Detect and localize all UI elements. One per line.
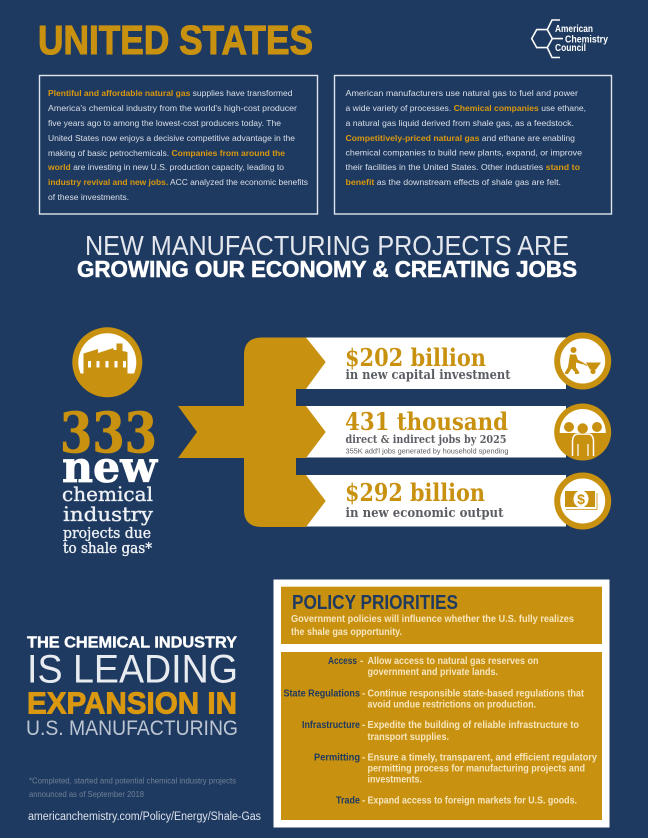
panel: intro right: benefit as the downstream effects of shale gas are felt. [346,177,561,187]
panel: intro right: chemical companies to build new plants, expand, or improve [346,148,582,158]
policy list: - [362,796,365,807]
policy list: transport supplies. [368,732,449,743]
section heading: NEW MANUFACTURING PROJECTS ARE [85,230,569,261]
panel: intro left: America's chemical industry from the world's high-cost producer [48,103,297,113]
icon: money: $ [577,491,585,507]
panel: intro right: their facilities in the United States. Other industries stand to [346,162,580,172]
panel: intro right: a natural gas liquid derived from shale gas, as a feedstock. [346,118,574,128]
footnote: announced as of September 2018 [29,790,145,799]
policy header: Government policies will influence whether the U.S. fully realizes [291,614,574,625]
stat: 333 new chemical industry projects: industry [63,502,154,526]
logo: American Chemistry Council: Council [555,42,586,54]
stat: 333 new chemical industry projects: projects due [63,526,151,542]
stat: 333 new chemical industry projects: to shale gas* [63,541,153,557]
policy list: - [362,689,365,700]
icon: money [557,476,608,526]
panel: intro right [334,76,612,214]
policy list: Expand access to foreign markets for U.S. goods. [368,796,577,807]
policy list: permitting process for manufacturing projects and [368,764,585,775]
bar: jobs: 355K add'l jobs generated by household spending [346,446,508,456]
policy list: Expedite the building of reliable infrastructure to [368,720,579,731]
bar: jobs [300,406,566,458]
heading: chemical industry leading expansion [26,634,238,740]
bar: jobs: 431 thousand [345,407,508,436]
policy header: the shale gas opportunity. [291,627,402,638]
section heading: GROWING OUR ECONOMY & CREATING JOBS [77,256,577,282]
policy list: Access [328,656,357,667]
icon: wheelbarrow worker [557,336,608,386]
panel: intro left: Plentiful and affordable natural gas supplies have transformed [48,88,293,98]
bar: capital investment: in new capital investment [346,368,510,383]
policy list: investments. [368,774,422,786]
panel: intro left: five years ago to among the lowest-cost producers today. The [48,118,281,128]
stat: 333 new chemical industry projects: chemical [62,482,153,506]
panel: intro left: world are investing in new U.S. production capacity, leading to [47,162,284,172]
policy list: - [362,753,365,764]
logo: American Chemistry Council: American [555,23,593,35]
panel: intro left: making of basic petrochemicals. Companies from around the [48,148,285,158]
policy list: - [360,656,363,667]
bar: economic output: in new economic output [346,506,504,521]
icon: people [554,404,611,460]
source url: americanchemistry.com/Policy/Energy/Shale-Gas [28,811,261,823]
bar: economic output [300,475,566,526]
heading: chemical industry leading expansion: THE CHEMICAL INDUSTRY [27,634,237,651]
policy list: government and private lands. [368,667,498,678]
logo: American Chemistry Council [532,20,608,58]
policy header: POLICY PRIORITIES [292,592,458,614]
bar: economic output: $292 billion [345,478,485,507]
panel: intro right: Competitively-priced natural gas and ethane are enabling [346,133,575,143]
stat: 333 new chemical industry projects [60,400,158,557]
panel: policy priorities [274,580,610,828]
section heading [77,230,577,282]
panel: intro right: a wide variety of processes. Chemical companies use ethane, [346,103,586,113]
title: UNITED STATES [38,17,313,63]
bar: jobs: direct & indirect jobs by 2025 [346,432,506,446]
policy list: avoid undue restrictions on production. [368,700,536,710]
panel: intro left [40,76,318,214]
stat: 333 new chemical industry projects: new [62,443,158,493]
policy list: - [362,720,365,731]
heading: chemical industry leading expansion: U.S. MANUFACTURING [26,717,238,740]
heading: chemical industry leading expansion: EXPANSION IN [27,685,237,720]
connector arrow [178,338,326,527]
heading: chemical industry leading expansion: IS LEADING [27,648,238,692]
policy list [281,652,602,820]
policy list: Permitting [314,753,360,764]
footnote [29,776,236,799]
policy list: Infrastructure [302,720,360,731]
bar: capital investment [300,338,566,389]
policy list: Allow access to natural gas reserves on [368,656,538,667]
panel: intro left: United States now enjoys a decisive competitive advantage in the [48,133,295,143]
stat: 333 new chemical industry projects: 333 [60,400,157,465]
policy list: State Regulations [284,689,360,700]
policy list: Ensure a timely, transparent, and efficient regulatory [368,753,597,764]
bar: capital investment: $202 billion [345,343,486,372]
policy list: Trade [336,796,360,807]
logo: American Chemistry Council: Chemistry [565,34,608,46]
footnote: *Completed, started and potential chemical industry projects [29,776,236,786]
policy header [281,587,602,644]
icon: factory [72,327,142,397]
panel: intro right: American manufacturers use natural gas to fuel and power [346,88,578,98]
policy list: Continue responsible state-based regulations that [368,689,585,700]
panel: intro left: of these investments. [48,192,129,202]
panel: intro left: industry revival and new jobs. ACC analyzed the economic benefits [48,177,309,187]
